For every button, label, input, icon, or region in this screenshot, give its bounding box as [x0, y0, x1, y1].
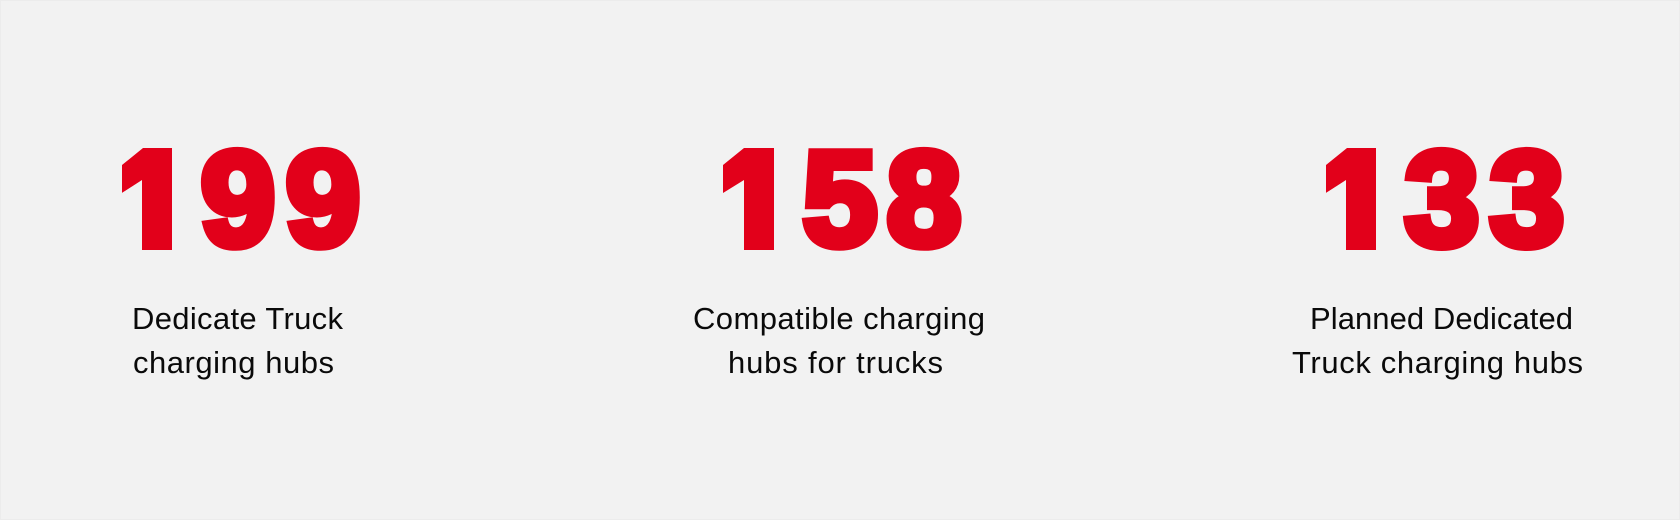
- number: 133: 3: [1405, 125, 1479, 274]
- label: planned dedicated truck charging hubs: Planned Dedicated: [1310, 301, 1573, 336]
- label: dedicate truck charging hubs: charging hubs: [133, 345, 334, 380]
- label: planned dedicated truck charging hubs: [1292, 301, 1583, 380]
- number: 158: 8: [887, 125, 961, 274]
- number: 199: 1: [115, 125, 189, 274]
- number: 199: 9: [201, 125, 275, 274]
- number: 158: 1: [717, 125, 791, 274]
- number: 158: 5: [803, 125, 877, 274]
- number: 158: [723, 146, 962, 251]
- number: 133: [1326, 146, 1564, 251]
- label: compatible charging hubs for trucks: Compatible charging: [693, 301, 985, 336]
- number: 133: 3: [1490, 125, 1564, 274]
- stat: 158 compatible charging hubs: [694, 146, 983, 374]
- infographic canvas: [122, 146, 1582, 380]
- number: 133: 1: [1319, 125, 1393, 274]
- number: 199: [122, 146, 360, 251]
- label: dedicate truck charging hubs: Dedicate Truck: [132, 301, 344, 336]
- stat: 199 dedicated truck charging hubs: [122, 146, 360, 380]
- stat: 133 planned dedicated truck charging hubs: [1292, 125, 1583, 380]
- label: dedicate truck charging hubs: [132, 301, 344, 380]
- label: compatible charging hubs for trucks: hubs for trucks: [728, 345, 943, 380]
- number: 199: 9: [286, 125, 360, 274]
- label: planned dedicated truck charging hubs: Truck charging hubs: [1292, 345, 1583, 380]
- label: compatible charging hubs for trucks: [693, 301, 985, 380]
